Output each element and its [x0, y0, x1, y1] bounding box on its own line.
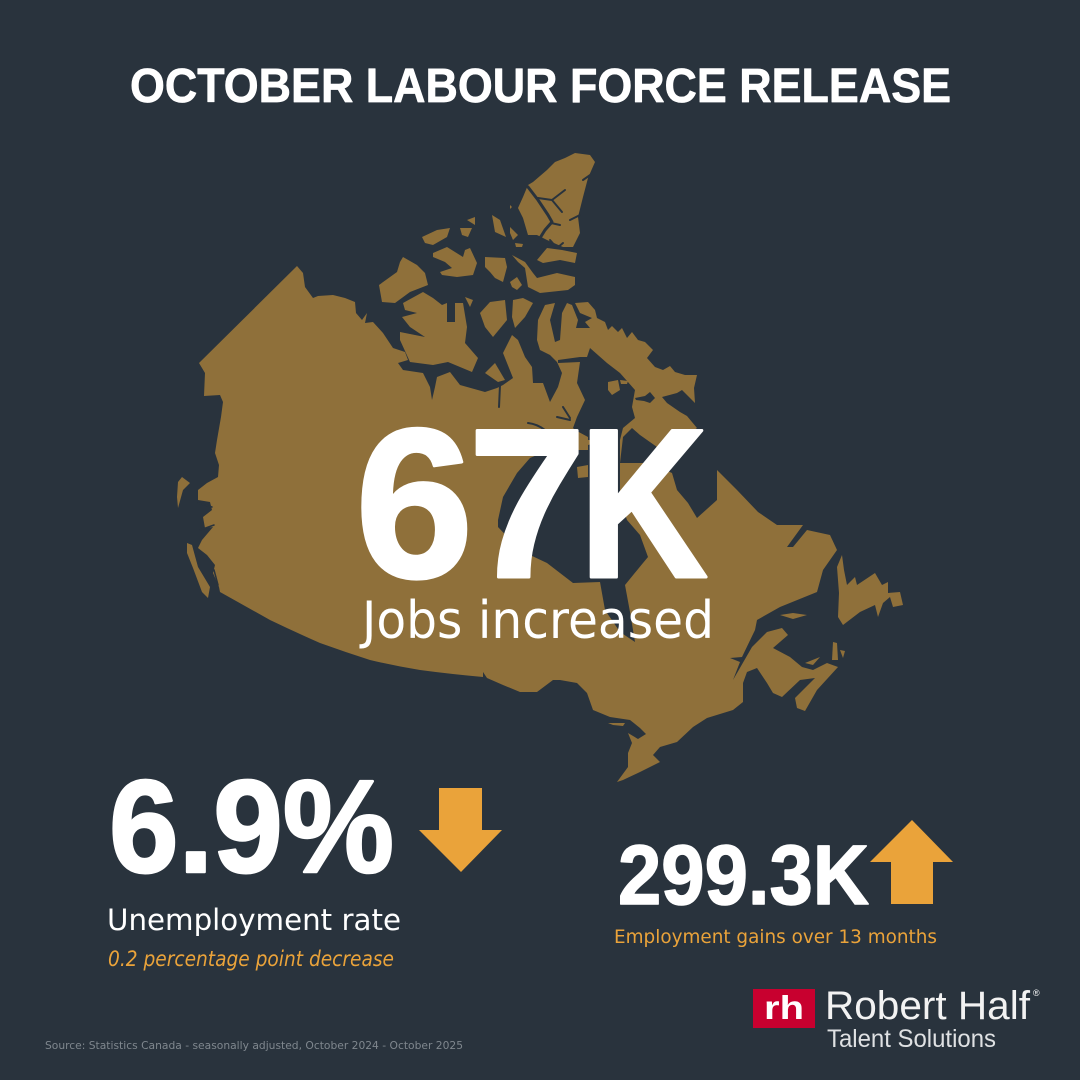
logo: Robert Half Talent Solutions	[753, 984, 1040, 1053]
label: unemployment rate: Unemployment rate	[107, 903, 401, 937]
icon: down arrow	[419, 788, 502, 872]
inland water overlays	[498, 348, 655, 642]
label: employment gains: Employment gains over 13 months	[614, 926, 937, 948]
big number: 67K: K	[579, 385, 708, 623]
map of Canada	[177, 153, 903, 782]
logo: Robert Half Talent Solutions: Robert Half	[825, 984, 1031, 1028]
note: percentage point decrease: 0.2 percentage point decrease	[108, 947, 394, 971]
big number: 67K	[355, 385, 708, 623]
label: jobs increased: Jobs increased	[359, 591, 714, 651]
logo: Robert Half Talent Solutions: ®	[1033, 988, 1040, 998]
stat: employment gains value: 299.3K	[618, 828, 869, 922]
icon: up arrow	[870, 820, 953, 904]
source note: Source: Statistics Canada - seasonally adjusted, October 2024 - October 2025	[45, 1039, 463, 1052]
logo: Robert Half Talent Solutions: rh	[764, 989, 804, 1026]
title: OCTOBER LABOUR FORCE RELEASE	[130, 59, 951, 113]
stat: unemployment rate value: 6.9%	[109, 753, 394, 900]
big number: 67K: 67	[355, 385, 586, 623]
logo: Robert Half Talent Solutions: Talent Solutions	[827, 1025, 996, 1053]
